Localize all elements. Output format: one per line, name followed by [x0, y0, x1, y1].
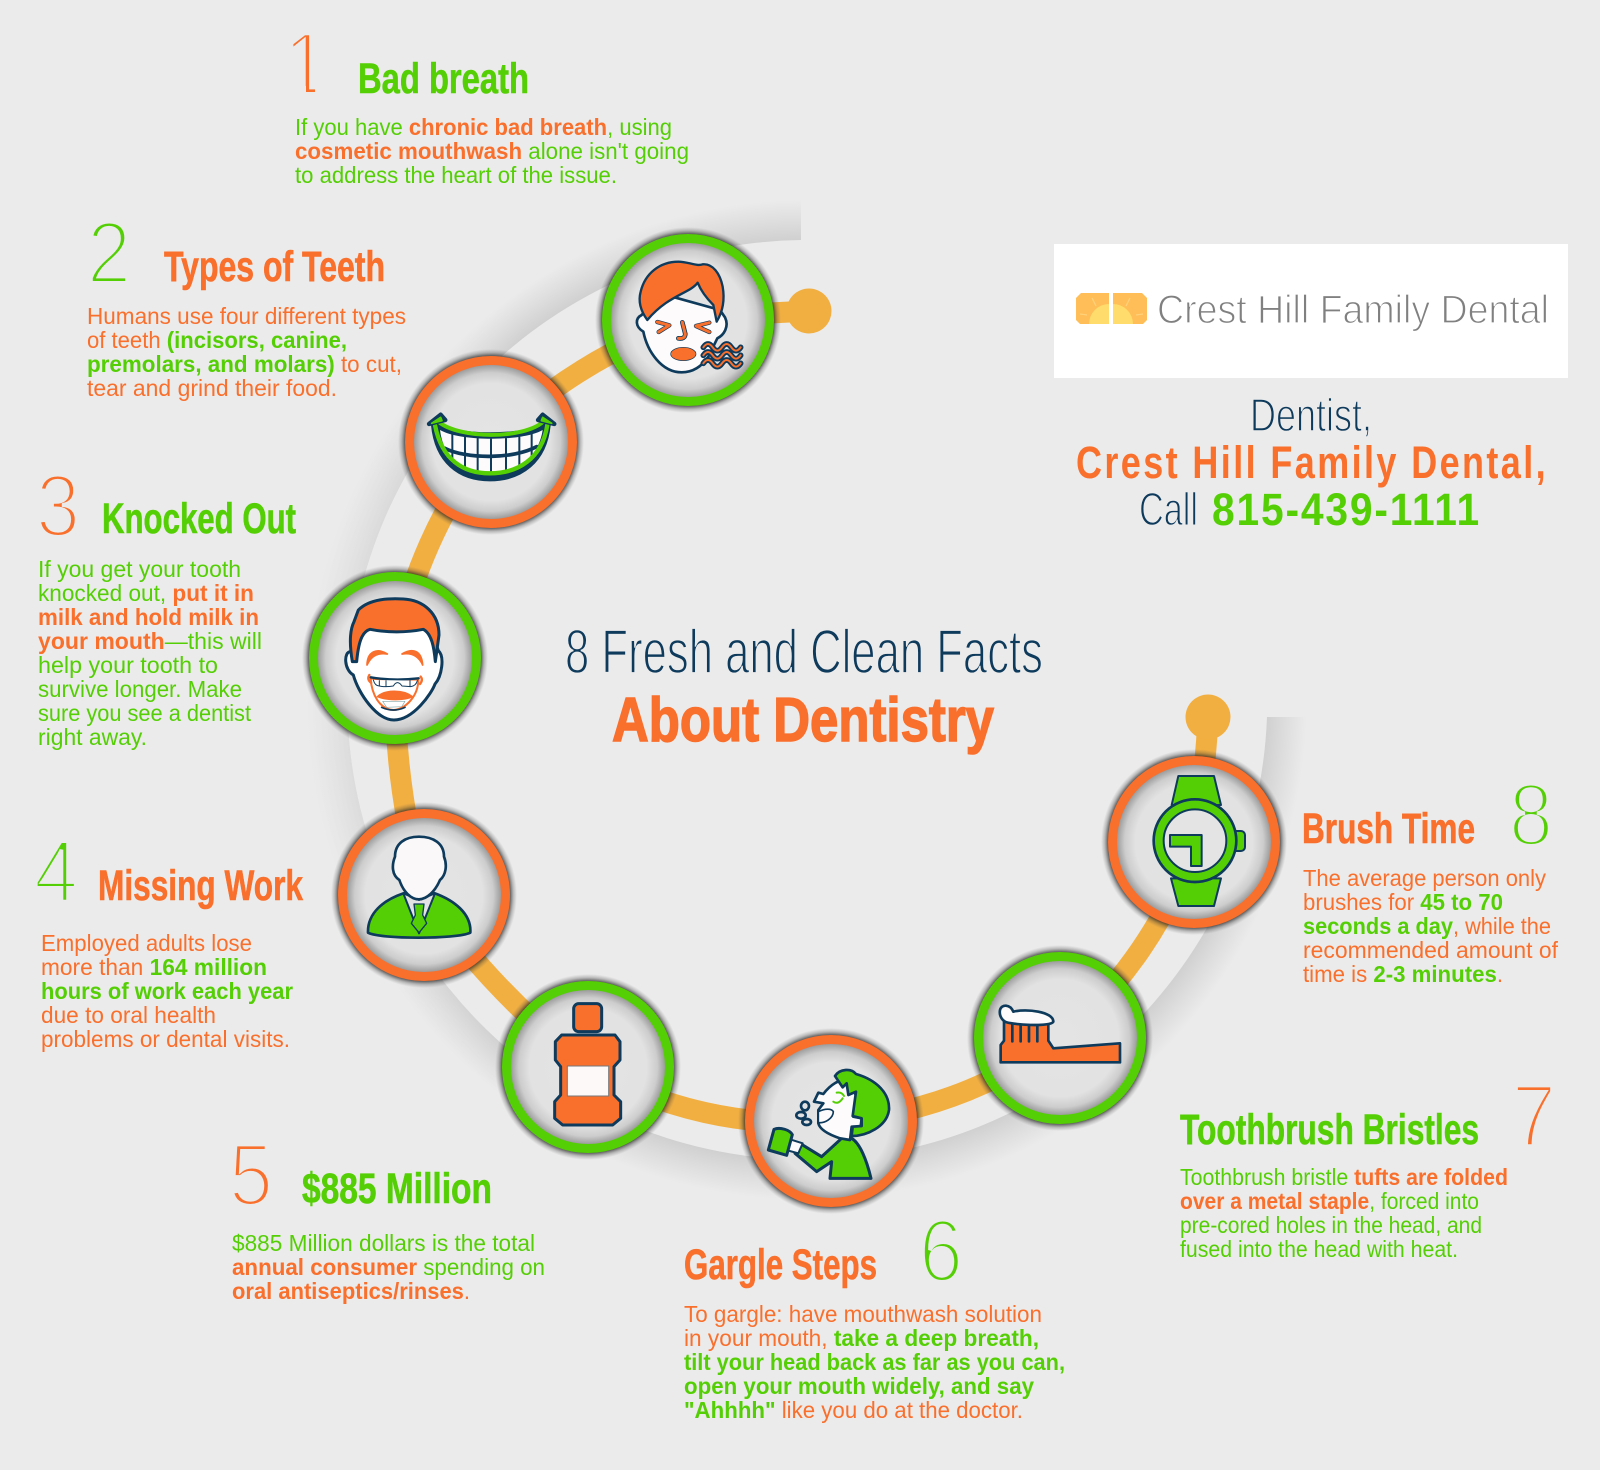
contact call to action: 815-439-1111	[1212, 484, 1481, 535]
heading: 885 million: $885 Million	[302, 1165, 492, 1213]
icon badge 3: knocked-out tooth face	[302, 565, 488, 751]
panel: fact 8 brush time	[1302, 765, 1559, 987]
number 1: 1	[284, 14, 328, 113]
heading: bad breath: Bad breath	[358, 55, 529, 103]
panel: fact 6 gargle steps	[684, 1201, 1065, 1423]
number 8: 8	[1509, 765, 1553, 864]
body text: right away.	[38, 724, 147, 750]
crescent shadow arc	[307, 200, 1307, 1200]
main title: 8 Fresh and Clean Facts	[565, 618, 1043, 687]
icon badge 8: wristwatch	[1101, 749, 1287, 935]
body text: brushes for 45 to 70	[1303, 889, 1503, 915]
body text: Humans use four different types	[87, 303, 406, 329]
body text: knocked out, put it in	[38, 580, 254, 606]
body text: If you have chronic bad breath, using	[295, 114, 672, 140]
body text: annual consumer spending on	[232, 1254, 545, 1280]
body text: problems or dental visits.	[41, 1026, 290, 1052]
logo panel	[1054, 244, 1568, 378]
body text: open your mouth widely, and say	[684, 1373, 1034, 1399]
body text: tilt your head back as far as you can,	[684, 1349, 1065, 1375]
contact call to action: Dentist,	[1250, 389, 1372, 441]
body text: $885 Million dollars is the total	[232, 1230, 535, 1256]
body text: survive longer. Make	[38, 676, 242, 702]
icon badge 1: bad breath face	[595, 227, 781, 413]
body text: help your tooth to	[38, 652, 218, 678]
panel: fact 7 toothbrush bristles	[1180, 1066, 1556, 1262]
body text: more than 164 million	[41, 954, 267, 980]
body text: To gargle: have mouthwash solution	[684, 1301, 1042, 1327]
body text	[1303, 865, 1559, 987]
number 6: 6	[919, 1201, 963, 1300]
panel: fact 5 885 million	[229, 1125, 545, 1304]
panel: fact 3 knocked out	[36, 456, 296, 750]
panel: fact 4 missing work	[34, 822, 303, 1052]
body text: your mouth—this will	[38, 628, 262, 654]
number 3: 3	[36, 456, 80, 555]
body text: hours of work each year	[41, 978, 293, 1004]
body text: The average person only	[1303, 865, 1546, 891]
body text: of teeth (incisors, canine,	[87, 327, 347, 353]
body text: cosmetic mouthwash alone isn't going	[295, 138, 689, 164]
body text: in your mouth, take a deep breath,	[684, 1325, 1039, 1351]
heading: brush time: Brush Time	[1302, 805, 1475, 853]
body text: oral antiseptics/rinses.	[232, 1278, 470, 1304]
panel: fact 1 bad breath	[293, 35, 688, 183]
logo wordmark: Crest Hill Family Dental	[1157, 288, 1549, 332]
icon badge 4: person in suit	[331, 802, 517, 988]
main title	[565, 618, 1043, 755]
body text: pre-cored holes in the head, and	[1180, 1212, 1482, 1238]
body text: premolars, and molars) to cut,	[87, 351, 402, 377]
body text: recommended amount of	[1303, 937, 1559, 963]
body text: due to oral health	[41, 1002, 216, 1028]
body text: milk and hold milk in	[38, 604, 259, 630]
body text: time is 2-3 minutes.	[1303, 961, 1503, 987]
body text	[41, 930, 293, 1052]
heading: missing work: Missing Work	[98, 862, 303, 910]
body text	[232, 1230, 545, 1304]
body text	[1180, 1164, 1508, 1262]
body text: Toothbrush bristle tufts are folded	[1180, 1164, 1508, 1190]
panel: fact 2 types of teeth	[87, 203, 406, 401]
main title: About Dentistry	[612, 686, 994, 755]
body text	[684, 1301, 1065, 1423]
number 7: 7	[1512, 1066, 1556, 1165]
body text	[295, 114, 689, 188]
icon badge 2: smile with teeth	[398, 349, 584, 535]
heading: types of teeth: Types of Teeth	[164, 243, 385, 291]
heading: knocked out: Knocked Out	[102, 495, 296, 543]
body text: fused into the head with heat.	[1180, 1236, 1458, 1262]
number 2: 2	[87, 203, 131, 302]
number 4: 4	[34, 822, 78, 921]
icon: sun logo	[1076, 293, 1147, 324]
body text: sure you see a dentist	[38, 700, 252, 726]
body text	[38, 556, 262, 750]
icon badge 7: toothbrush	[967, 945, 1153, 1131]
contact call to action: Call	[1139, 483, 1198, 535]
heading: toothbrush bristles: Toothbrush Bristles	[1180, 1106, 1479, 1154]
icon badge 6: boy gargling	[738, 1028, 924, 1214]
body text: seconds a day, while the	[1303, 913, 1551, 939]
heading: gargle steps: Gargle Steps	[684, 1241, 877, 1289]
connecting path with end dots	[395, 288, 1230, 1123]
contact call to action	[1076, 389, 1548, 535]
body text: If you get your tooth	[38, 556, 241, 582]
body text: over a metal staple, forced into	[1180, 1188, 1479, 1214]
body text: tear and grind their food.	[87, 375, 337, 401]
body text: "Ahhhh" like you do at the doctor.	[684, 1397, 1023, 1423]
icon badge 5: mouthwash bottle	[495, 974, 681, 1160]
body text: Employed adults lose	[41, 930, 252, 956]
body text: to address the heart of the issue.	[295, 162, 617, 188]
body text	[87, 303, 406, 401]
number 5: 5	[229, 1125, 273, 1224]
